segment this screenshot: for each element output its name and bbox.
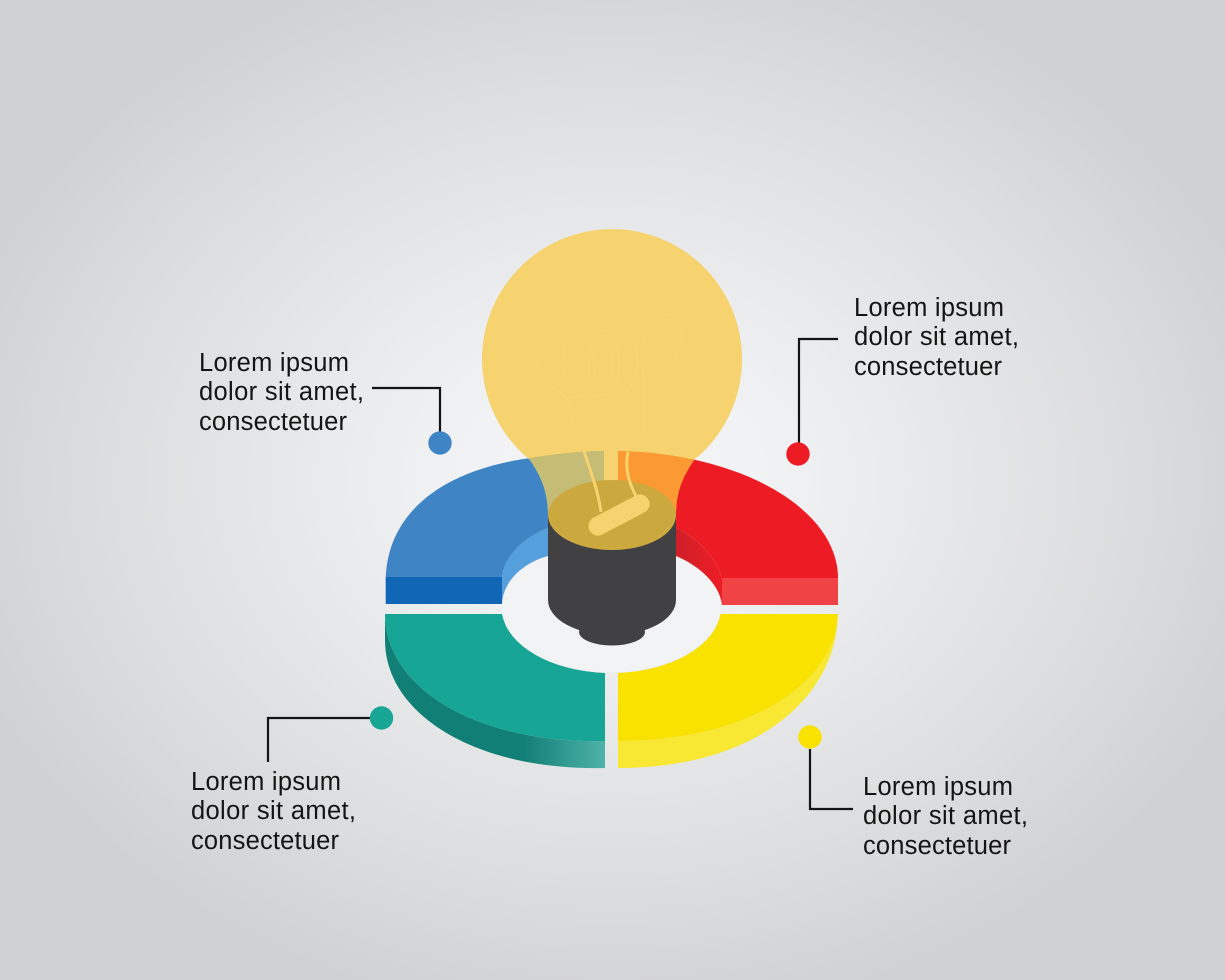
base tip xyxy=(579,618,645,646)
blue and red seen through glass xyxy=(528,451,694,514)
filament wires xyxy=(584,451,637,512)
callout: red: Lorem ipsum xyxy=(854,294,1004,322)
callout: blue: consectetuer xyxy=(199,408,348,436)
ring segment: teal xyxy=(385,614,605,768)
ring segment: yellow xyxy=(618,614,838,768)
callout: red: dolor sit amet, xyxy=(854,323,1019,351)
callout: teal: Lorem ipsum xyxy=(191,768,341,796)
base top xyxy=(548,480,676,550)
callout: teal: consectetuer xyxy=(191,827,340,855)
callout: yellow: consectetuer xyxy=(863,832,1012,860)
callout: red xyxy=(786,294,1019,466)
ring segment: red xyxy=(618,451,838,605)
filament xyxy=(537,314,682,430)
callout: blue: dolor sit amet, xyxy=(199,378,364,406)
callout: yellow: dolor sit amet, xyxy=(863,802,1028,830)
callout: yellow: Lorem ipsum xyxy=(863,773,1013,801)
center hole of ring xyxy=(501,540,721,672)
ring segment: blue xyxy=(386,451,604,604)
filament support xyxy=(598,504,640,526)
bulb glass xyxy=(482,229,742,515)
icon: light bulb xyxy=(482,229,742,646)
callout: blue xyxy=(199,349,452,455)
callout: teal: dolor sit amet, xyxy=(191,797,356,825)
callout: teal xyxy=(191,706,393,855)
callout: blue: Lorem ipsum xyxy=(199,349,349,377)
metal base xyxy=(548,515,676,635)
callout: yellow xyxy=(798,725,1028,860)
callout: red: consectetuer xyxy=(854,353,1002,381)
